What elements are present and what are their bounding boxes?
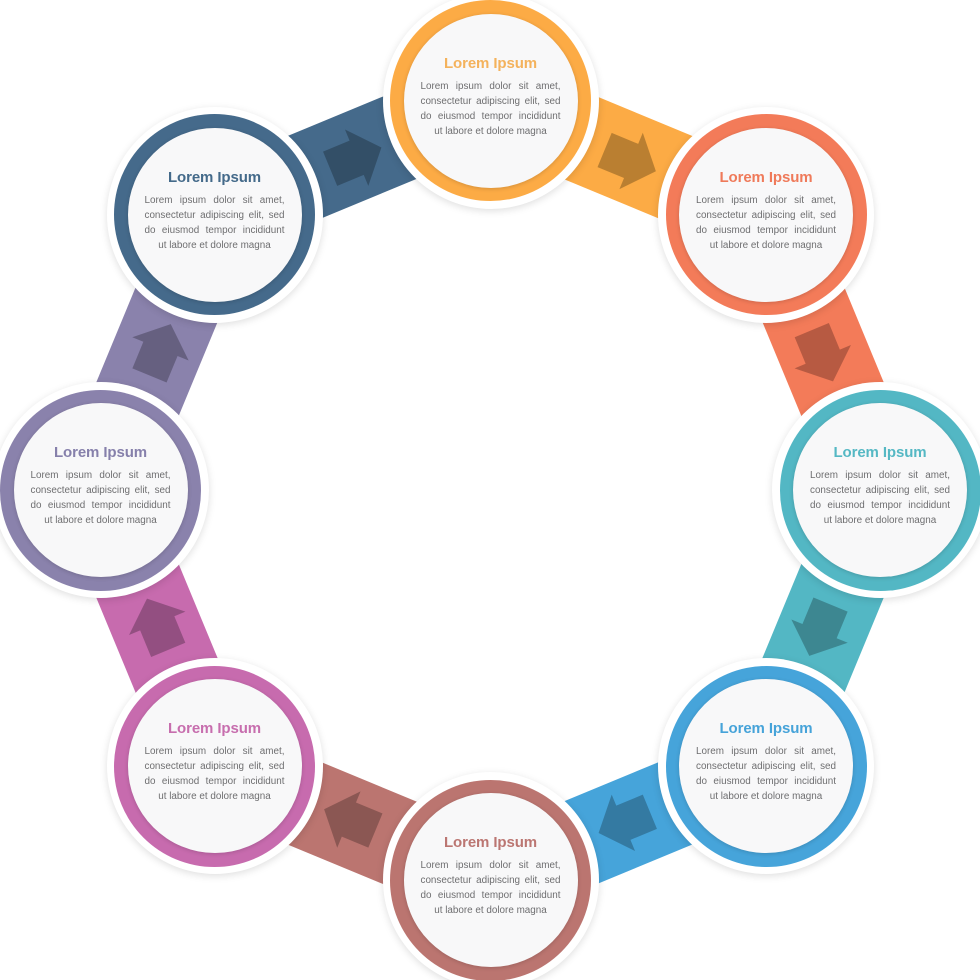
text block: consectetur adipiscing elit, sed <box>420 96 560 106</box>
ring <box>666 666 866 866</box>
text block: do eiusmod tempor incididunt <box>696 776 836 787</box>
arrow <box>121 312 199 387</box>
strip <box>732 215 914 489</box>
band: purple to navy <box>66 215 248 489</box>
text block: consectetur adipiscing elit, sed <box>696 761 836 772</box>
strip <box>66 491 248 765</box>
text block: ut labore et dolore magna <box>824 515 936 526</box>
text block: do eiusmod tempor incididunt <box>420 110 560 122</box>
ring <box>780 390 980 590</box>
arrow <box>784 318 861 393</box>
text block: Lorem ipsum dolor sit amet, <box>144 194 284 206</box>
panel: orange step <box>382 0 598 208</box>
text block: do eiusmod tempor incididunt <box>30 500 170 511</box>
disc <box>679 128 853 302</box>
arrow <box>312 781 387 859</box>
text block: ut labore et dolore magna <box>434 905 547 916</box>
text block: consectetur adipiscing elit, sed <box>30 485 170 496</box>
panel: navy step <box>106 106 322 322</box>
heading: Lorem Ipsum <box>54 444 147 461</box>
panel: blue step <box>658 658 874 874</box>
text block: consectetur adipiscing elit, sed <box>810 485 950 496</box>
heading: Lorem Ipsum <box>719 168 813 186</box>
disc <box>793 403 967 577</box>
text block <box>420 80 560 136</box>
text block: ut labore et dolore magna <box>158 791 271 802</box>
text block: Lorem ipsum dolor sit amet, <box>144 746 284 757</box>
text block: do eiusmod tempor incididunt <box>420 890 560 901</box>
ring <box>0 390 201 590</box>
strip <box>491 732 765 914</box>
arrow <box>593 122 668 199</box>
text block: do eiusmod tempor incididunt <box>696 224 836 236</box>
ring <box>114 666 315 866</box>
band: coral to teal <box>732 215 914 489</box>
text block <box>144 194 284 250</box>
panel: rose step <box>382 772 598 980</box>
text block: consectetur adipiscing elit, sed <box>144 761 284 772</box>
text block: Lorem ipsum dolor sit amet, <box>810 470 950 481</box>
band: blue to rose <box>491 732 765 914</box>
text block: ut labore et dolore magna <box>710 791 822 802</box>
band: navy to orange <box>215 67 489 248</box>
disc <box>404 793 578 967</box>
panel: purple step <box>0 382 208 598</box>
text block: do eiusmod tempor incididunt <box>144 224 284 236</box>
text block <box>30 470 170 526</box>
text block <box>696 746 836 802</box>
heading: Lorem Ipsum <box>833 444 927 461</box>
text block: ut labore et dolore magna <box>710 240 822 250</box>
band: pink to purple <box>66 491 248 765</box>
band: rose to pink <box>215 732 489 914</box>
band: teal to blue <box>732 491 914 765</box>
panel: teal step <box>772 382 980 598</box>
text block: consectetur adipiscing elit, sed <box>696 210 836 220</box>
disc <box>679 679 853 853</box>
text block <box>810 470 950 526</box>
strip <box>491 67 765 248</box>
arrow <box>318 119 393 197</box>
text block: consectetur adipiscing elit, sed <box>144 210 284 220</box>
text block <box>696 194 836 250</box>
band: orange to coral <box>491 67 765 248</box>
text block: do eiusmod tempor incididunt <box>810 500 950 511</box>
disc <box>14 403 188 577</box>
text block: Lorem ipsum dolor sit amet, <box>420 860 560 871</box>
arrow <box>587 784 662 861</box>
text block: ut labore et dolore magna <box>158 240 271 250</box>
panel: coral step <box>658 106 874 322</box>
ring <box>114 114 315 315</box>
ring <box>390 0 591 201</box>
ring <box>666 114 866 315</box>
disc <box>404 14 578 188</box>
text block: ut labore et dolore magna <box>434 126 547 136</box>
heading: Lorem Ipsum <box>168 168 261 186</box>
heading: Lorem Ipsum <box>444 834 537 851</box>
panel: pink step <box>106 658 322 874</box>
strip <box>66 215 248 489</box>
text block: Lorem ipsum dolor sit amet, <box>30 470 170 481</box>
text block: Lorem ipsum dolor sit amet, <box>696 194 836 206</box>
strip <box>215 67 489 248</box>
arrow <box>781 593 859 668</box>
text block: Lorem ipsum dolor sit amet, <box>420 80 560 92</box>
disc <box>128 128 302 302</box>
disc <box>128 679 302 853</box>
text block <box>144 746 284 802</box>
heading: Lorem Ipsum <box>719 720 813 737</box>
heading: Lorem Ipsum <box>444 54 537 72</box>
heading: Lorem Ipsum <box>168 720 261 737</box>
text block: consectetur adipiscing elit, sed <box>420 875 560 886</box>
strip <box>215 732 489 914</box>
strip <box>732 491 914 765</box>
text block: ut labore et dolore magna <box>44 515 157 526</box>
arrow <box>119 587 196 662</box>
text block <box>420 860 560 916</box>
ring <box>390 780 591 980</box>
text block: Lorem ipsum dolor sit amet, <box>696 746 836 757</box>
text block: do eiusmod tempor incididunt <box>144 776 284 787</box>
